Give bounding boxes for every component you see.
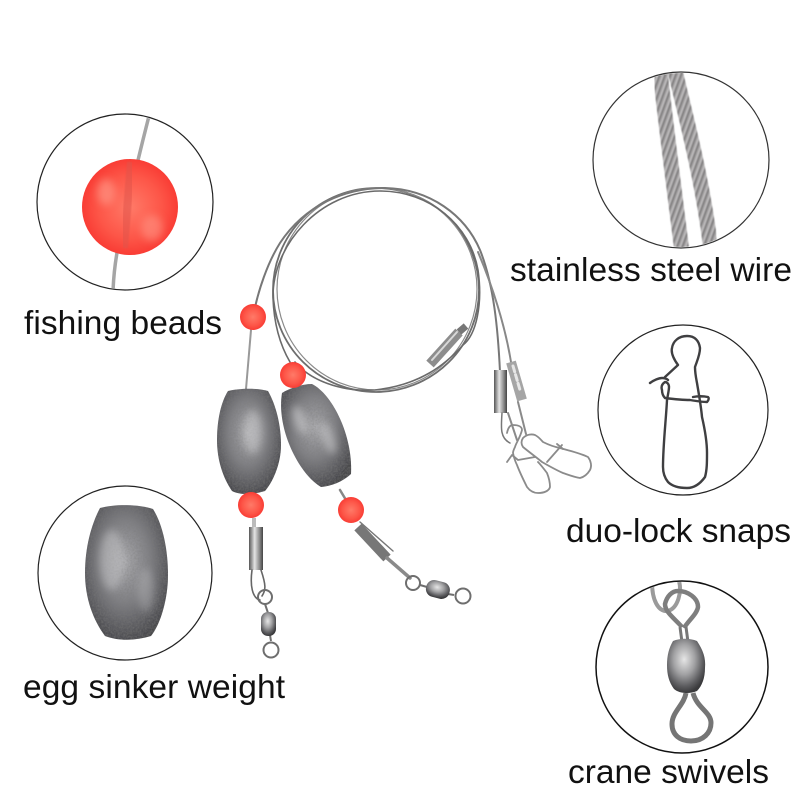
egg sinker right <box>281 384 351 487</box>
circle: crane swivels <box>596 581 768 753</box>
circle: fishing beads <box>37 112 213 292</box>
upper-right sleeves <box>494 362 526 443</box>
lower-left sleeve and wire <box>249 518 265 600</box>
circle: duo-lock snaps <box>598 325 768 495</box>
red beads on rig <box>238 304 364 523</box>
circle: stainless steel wire <box>593 70 769 252</box>
circle: egg sinker <box>38 486 212 660</box>
wire rig: steel loop and leaders <box>246 188 526 600</box>
egg sinker left <box>217 389 281 494</box>
label: egg sinker weight: egg sinker weight <box>23 669 286 706</box>
small swivel right <box>406 576 470 604</box>
small swivel left <box>258 590 278 658</box>
crimp on loop <box>430 326 466 364</box>
label: duo-lock snaps: duo-lock snaps <box>566 513 791 550</box>
label: fishing beads: fishing beads <box>24 305 222 342</box>
small duo-lock snaps on rig <box>507 425 591 493</box>
label: stainless steel wire: stainless steel wire <box>510 252 792 289</box>
label: crane swivels: crane swivels <box>568 754 769 791</box>
lower-right sleeve and wire <box>340 490 410 578</box>
